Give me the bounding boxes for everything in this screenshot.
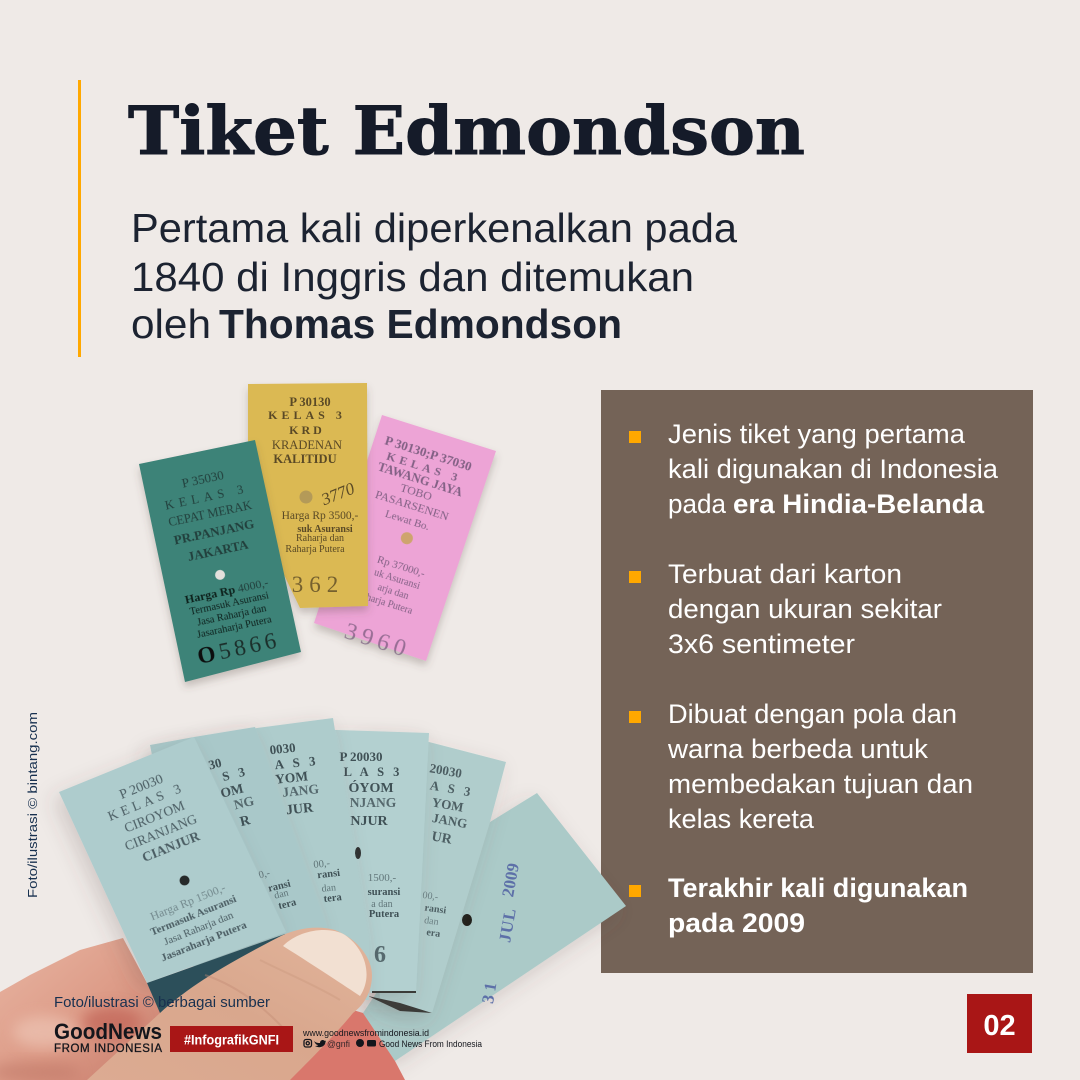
yellow ticket: KALITIDU	[273, 452, 337, 466]
ticket 2	[142, 727, 296, 970]
ticket 1: CIRANJANG	[122, 811, 199, 854]
pink ticket: arja dan	[376, 582, 410, 602]
fact 1: era Hindia-Belanda	[733, 489, 985, 519]
title: Tiket Edmondson	[128, 92, 805, 170]
hashtag badge: #InfografikGNFI	[184, 1032, 279, 1048]
green ticket: Harga Rp 4000,-	[183, 575, 270, 607]
green ticket: CEPAT MERAK	[167, 498, 253, 529]
pink ticket: TAWANG JAYA	[376, 460, 464, 499]
icon: facebook	[356, 1039, 364, 1047]
pink ticket: harja Putera	[365, 592, 414, 617]
pink ticket: P 30130;P 37030	[383, 433, 474, 474]
ticket 1: Harga Rp 1500,-	[148, 880, 228, 923]
ticket 6 stamped: 2009	[498, 862, 523, 898]
fact 3	[629, 699, 973, 834]
hashtag badge	[170, 1026, 293, 1052]
ticket 1: Termasuk Asuransi	[149, 893, 238, 938]
fact 3: kelas kereta	[668, 804, 815, 834]
ticket 3: 0030	[269, 740, 296, 757]
ticket 1: CIANJUR	[140, 828, 202, 865]
yellow ticket: Harga Rp 3500,-	[282, 510, 359, 522]
ticket 2: R	[238, 813, 253, 830]
green ticket: O5866	[195, 627, 282, 669]
ticket 6 stamped	[363, 793, 626, 1061]
ticket 5: 20030	[428, 760, 463, 781]
logo: GoodNews: GoodNews	[54, 1019, 162, 1044]
ticket 1: Jasa Raharja dan	[162, 909, 236, 948]
ticket 2: ransi	[267, 878, 292, 895]
green ticket: P 35030	[180, 467, 225, 491]
page number: 02	[983, 1010, 1016, 1042]
ticket 4	[335, 730, 429, 1004]
accent bar	[78, 80, 81, 357]
ticket 3	[256, 718, 369, 1010]
fact 4: Terakhir kali digunakan	[668, 873, 968, 903]
green ticket: KELAS 3	[164, 481, 249, 513]
ticket 4: L A S 3	[344, 765, 402, 779]
fact 1: kali digunakan di Indonesia	[668, 454, 999, 484]
yellow ticket: 362	[292, 572, 344, 597]
fact 4: pada 2009	[668, 908, 805, 938]
photo: hand holding fan of tickets	[0, 718, 626, 1080]
pink ticket: uk Asuransi	[373, 567, 421, 592]
yellow ticket: KRADENAN	[272, 438, 342, 452]
source credit: Foto/ilustrasi © berbagai sumber	[54, 994, 270, 1011]
ticket 4: 6	[374, 942, 386, 968]
green ticket: JAKARTA	[186, 536, 250, 564]
ticket 2: 30	[207, 755, 223, 772]
ticket 5	[368, 735, 506, 1013]
ticket 4: ÓYOM	[348, 779, 394, 796]
ticket 5: ransi	[424, 903, 447, 917]
dark underside of tickets	[147, 934, 285, 1013]
ticket 2: NG	[232, 793, 256, 812]
fact 2: Terbuat dari karton	[668, 559, 902, 589]
photo credit vertical: Foto/ilustrasi © bintang.com	[25, 712, 40, 898]
photo: three coloured tickets	[139, 383, 496, 682]
fact 2: dengan ukuran sekitar	[668, 594, 942, 624]
ticket 2: tera	[277, 897, 298, 912]
fact 3: warna berbeda untuk	[667, 734, 929, 764]
pink ticket: TOBO	[399, 480, 434, 504]
subtitle: Thomas Edmondson	[219, 301, 622, 347]
ticket 2: S 3	[220, 763, 249, 784]
pink ticket: Rp 37000,-	[376, 554, 427, 580]
yellow ticket: suk Asuransi	[297, 524, 353, 535]
green ticket: Termasuk Asuransi	[189, 590, 270, 618]
fact 3: membedakan tujuan dan	[668, 769, 973, 799]
fact 3: Dibuat dengan pola dan	[668, 699, 957, 729]
social links	[302, 1028, 483, 1050]
ticket 4: suransi	[368, 887, 400, 898]
pink ticket: PASARSENEN	[374, 487, 451, 523]
ticket 3: 00,-	[313, 858, 331, 871]
ticket 1: P 20030	[117, 772, 166, 803]
ticket 4: P 20030	[340, 749, 382, 764]
ticket 3: JUR	[285, 801, 315, 818]
ticket 4: 1500,-	[368, 872, 397, 884]
ticket 2: 0,-	[258, 868, 272, 881]
page number	[967, 994, 1032, 1053]
pink ticket: Lewat Bo.	[384, 508, 431, 533]
yellow ticket: Raharja Putera	[285, 544, 345, 555]
ticket 4: a dan	[371, 899, 393, 910]
icon: youtube	[367, 1040, 376, 1046]
ticket 5: UR	[430, 829, 454, 848]
yellow ticket: KELAS 3	[268, 408, 346, 422]
yellow ticket: KRD	[289, 423, 325, 437]
ticket 1: KELAS 3	[106, 779, 187, 824]
subtitle: Pertama kali diperkenalkan pada	[131, 205, 737, 251]
panel: facts	[601, 390, 1033, 973]
ticket 5: A S 3	[429, 777, 475, 800]
hand back fingers	[0, 938, 165, 1080]
ticket 3: ransi	[317, 868, 341, 881]
ticket 1: Jasaraharja Putera	[159, 919, 249, 964]
ticket 2: dan	[273, 887, 290, 902]
ticket 4: NJANG	[350, 795, 397, 810]
ticket 4: NJUR	[350, 814, 389, 829]
ticket 3: tera	[323, 892, 343, 905]
pink ticket	[314, 415, 496, 665]
ticket 5: 00,-	[422, 890, 439, 903]
ticket 5: YOM	[431, 794, 465, 815]
ticket 5: dan	[423, 915, 439, 928]
ticket 5: era	[426, 927, 441, 940]
ticket 1: CIROYOM	[122, 798, 187, 836]
green ticket	[139, 440, 301, 682]
logo: GoodNews	[54, 1019, 162, 1055]
ticket 3: JANG	[281, 781, 320, 800]
pink ticket: KELAS 3	[385, 449, 463, 485]
ticket 4: Putera	[369, 909, 400, 920]
ticket 6 stamped: 31	[478, 977, 501, 1005]
social links: Good News From Indonesia	[379, 1039, 483, 1050]
logo: GoodNews: FROM INDONESIA	[54, 1043, 162, 1055]
ticket 2: OM	[219, 780, 245, 801]
pink ticket: 3960	[341, 619, 414, 664]
fact 2: 3x6 sentimeter	[668, 629, 855, 659]
icon: twitter	[314, 1040, 326, 1047]
fact 2	[629, 559, 942, 659]
green ticket: PR.PANJANG	[172, 516, 255, 548]
social links: www.goodnewsfromindonesia.id	[302, 1028, 429, 1039]
fact 4	[629, 873, 968, 938]
fact 1	[629, 419, 999, 519]
thumb and palm	[87, 928, 405, 1080]
fact 1: Jenis tiket yang pertama	[668, 419, 966, 449]
yellow ticket: 3770	[318, 479, 358, 509]
yellow ticket: P 30130	[289, 395, 331, 409]
green ticket: Jasaraharja Putera	[196, 614, 273, 641]
ticket 1	[59, 737, 286, 983]
subtitle: 1840 di Inggris dan ditemukan	[131, 254, 694, 300]
icon: instagram	[304, 1040, 312, 1047]
ticket 6 stamped: JUL	[495, 906, 520, 944]
subtitle	[131, 205, 737, 347]
social links: @gnfi	[327, 1039, 350, 1050]
fact 1: pada	[668, 489, 727, 519]
subtitle: oleh	[131, 301, 211, 347]
ticket 3: A S 3	[274, 753, 319, 772]
ticket 5: JANG	[431, 810, 469, 831]
yellow ticket	[248, 383, 368, 608]
ticket 3: dan	[321, 882, 337, 895]
ticket 3: YOM	[274, 768, 309, 787]
green ticket: Jasa Raharja dan	[196, 603, 268, 629]
yellow ticket: Raharja dan	[296, 533, 344, 544]
